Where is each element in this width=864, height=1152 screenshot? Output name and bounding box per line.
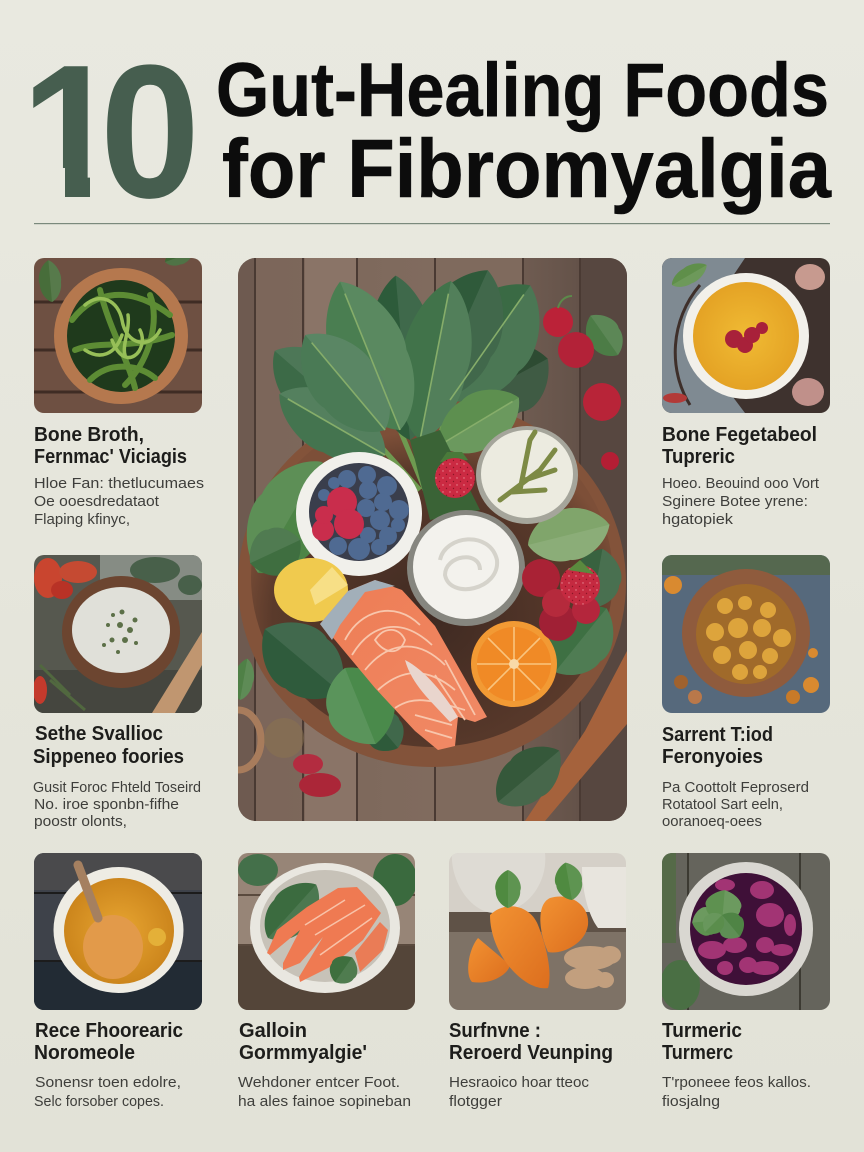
orange slice <box>471 621 557 707</box>
description: Sginere Botee yrene: <box>662 494 808 510</box>
description: Pa Coottolt Feproserd <box>662 780 809 796</box>
item 6 <box>238 853 417 1110</box>
description <box>34 1075 181 1110</box>
raspberries in plate <box>522 559 600 641</box>
strawberry centre <box>435 452 475 498</box>
image: chickpea bowl <box>662 555 830 713</box>
heading <box>662 424 817 468</box>
heading: Sethe Svallioc <box>35 723 163 745</box>
heading: Reroerd Veunping <box>449 1042 613 1064</box>
description: Hoeo. Beouind ooo Vort <box>662 476 819 492</box>
title <box>33 60 832 215</box>
heading: Surfnvne : <box>449 1020 541 1042</box>
bowl of yogurt <box>407 510 525 626</box>
description <box>33 780 201 830</box>
description: Sonensr toen edolre, <box>35 1075 181 1091</box>
heading: Turmerc <box>662 1042 733 1064</box>
heading <box>449 1020 613 1064</box>
title: for Fibromyalgia <box>222 122 832 215</box>
item 5 <box>34 853 202 1110</box>
description: fiosjalng <box>662 1094 720 1110</box>
image: seaweed bowl <box>34 244 202 413</box>
heading: Sarrent T:iod <box>662 724 773 746</box>
description: poostr olonts, <box>34 814 127 830</box>
heading: Noromeole <box>34 1042 135 1064</box>
heading <box>34 424 187 468</box>
description <box>34 476 204 528</box>
heading <box>34 1020 183 1064</box>
item 3 <box>33 555 202 830</box>
heading: Turmeric <box>662 1020 742 1042</box>
heading: Feronyoies <box>662 746 763 768</box>
description: No. iroe sponbn-fifhe <box>34 797 179 813</box>
description: ooranoeq-oees <box>662 814 762 830</box>
wooden ring, spices and red beans <box>238 658 341 797</box>
wooden spoon <box>525 651 627 821</box>
bowl of blueberries and raspberries <box>296 452 422 576</box>
dish with herb <box>476 426 578 524</box>
image: white dip bowl <box>33 555 202 713</box>
heading: Rece Fhoorearic <box>35 1020 183 1042</box>
greens: spinach leaves <box>246 270 622 675</box>
title: 0 <box>100 26 200 238</box>
plate <box>238 399 626 767</box>
heading <box>239 1020 367 1064</box>
image: purple beet bowl <box>660 853 830 1010</box>
lemon <box>274 558 348 622</box>
heading <box>662 724 773 768</box>
description <box>662 476 819 528</box>
description: Gusit Foroc Fhteld Toseird <box>33 780 201 796</box>
description: Rotatool Sart eeln, <box>662 797 783 813</box>
panel: central food photo <box>215 254 632 821</box>
image: turmeric soup bowl <box>34 853 202 1010</box>
description <box>238 1075 411 1110</box>
description: Flaping kfinyc, <box>34 512 130 528</box>
salmon steak <box>320 580 487 750</box>
heading: Tupreric <box>662 446 735 468</box>
item 2 <box>662 257 830 528</box>
description <box>449 1075 589 1110</box>
item 8 <box>660 853 830 1110</box>
bottom left leaves <box>262 622 404 751</box>
heading: Fernmac' Viciagis <box>34 446 187 468</box>
description: hgatopiek <box>662 512 734 528</box>
description <box>662 780 809 830</box>
image: salmon fillet bowl <box>238 853 417 1010</box>
scattered berries top right <box>543 296 632 470</box>
heading <box>662 1020 742 1064</box>
title: 1 <box>21 26 121 238</box>
item 4 <box>662 555 830 830</box>
bottom leaf <box>496 746 561 806</box>
description: T'rponeee feos kallos. <box>662 1075 811 1091</box>
description: ha ales fainoe sopineban <box>238 1094 411 1110</box>
description: Selc forsober copes. <box>34 1094 164 1110</box>
heading: Bone Broth, <box>34 424 144 446</box>
description: flotgger <box>449 1094 502 1110</box>
heading: Galloin <box>239 1020 307 1042</box>
description: Hesraoico hoar tteoc <box>449 1075 589 1091</box>
item 1 <box>34 244 204 528</box>
description: Oe ooesdredataot <box>34 494 159 510</box>
description: Wehdoner entcer Foot. <box>238 1075 400 1091</box>
heading: Sippeneo foories <box>33 746 184 768</box>
heading <box>33 723 184 768</box>
item 7 <box>449 853 627 1110</box>
heading: Gormmyalgie' <box>239 1042 367 1064</box>
heading: Bone Fegetabeol <box>662 424 817 446</box>
image: carrots and ginger <box>449 853 627 1010</box>
description <box>662 1075 811 1110</box>
description: Hloe Fan: thetlucumaes <box>34 476 204 492</box>
image: golden soup bowl <box>662 257 830 413</box>
